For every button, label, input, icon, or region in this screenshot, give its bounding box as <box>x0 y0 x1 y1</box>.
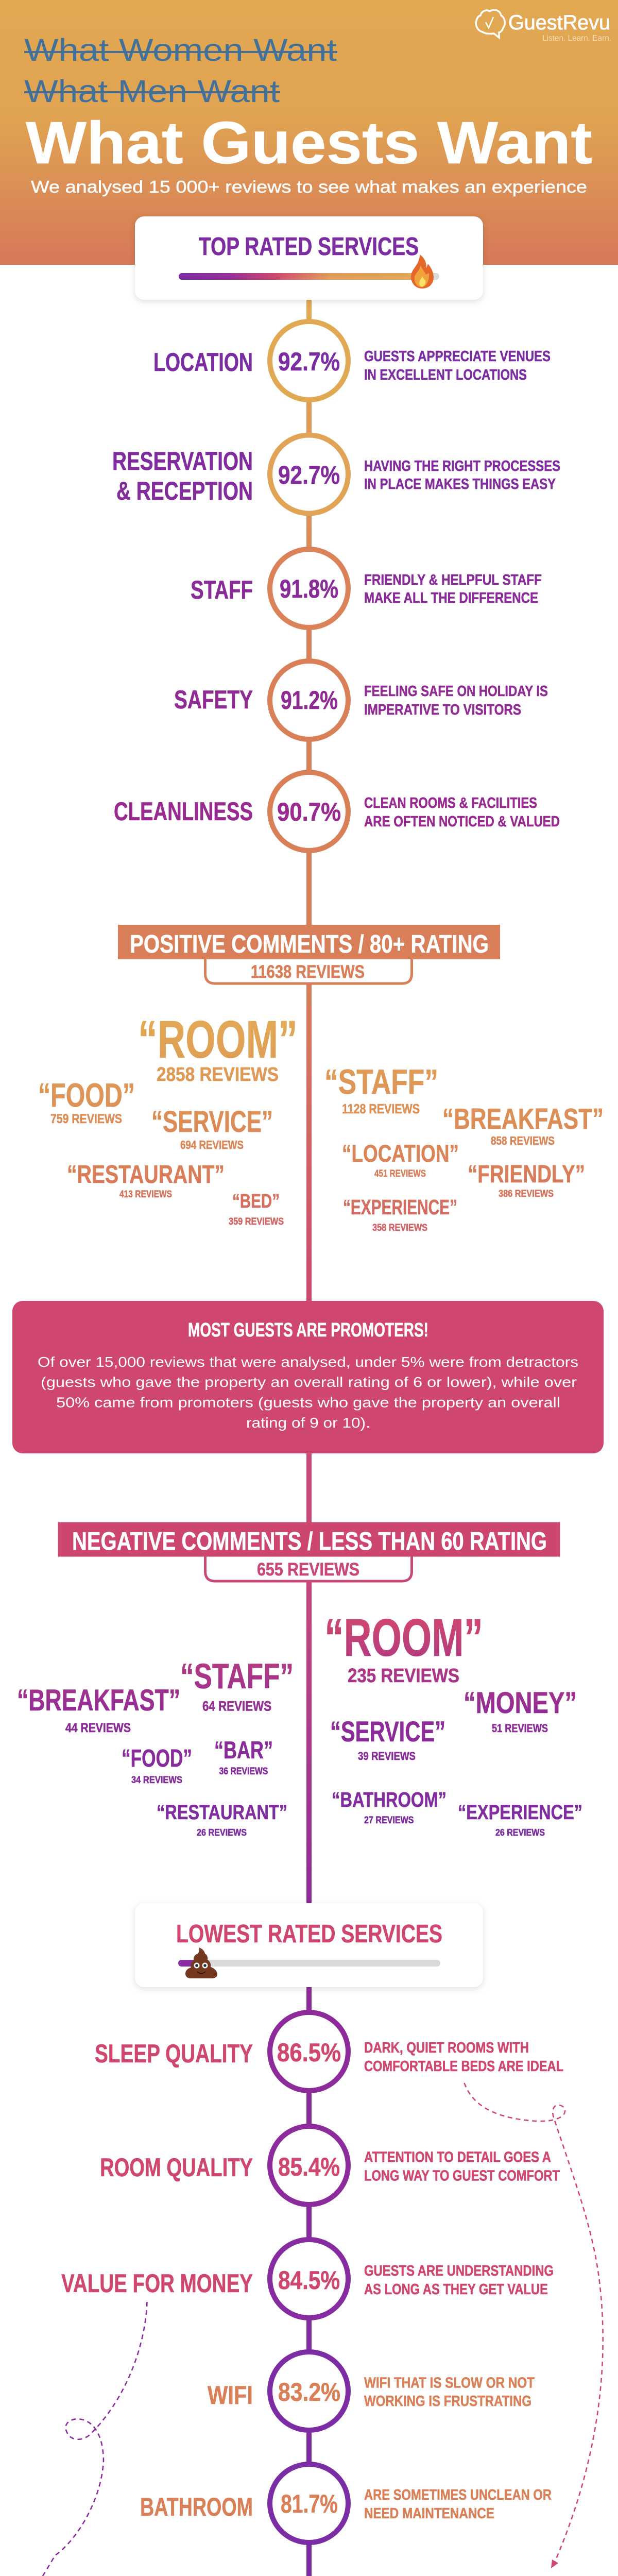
review count tab: 655 REVIEWS <box>257 1560 359 1580</box>
description <box>364 572 542 606</box>
percentage: 83.2% <box>278 2378 340 2406</box>
word cloud: negative comments <box>17 1608 582 1838</box>
word: friendly <box>468 1161 585 1199</box>
circle <box>270 2126 348 2205</box>
description <box>364 458 560 493</box>
label: VALUE FOR MONEY <box>61 2269 253 2298</box>
description: IN EXCELLENT LOCATIONS <box>364 367 527 383</box>
banner: negative comments <box>58 1522 560 1581</box>
struck-out heading: What Women Want: What Women Want <box>24 32 337 67</box>
timeline line: lowest rated <box>306 1986 312 2576</box>
word: experience <box>458 1801 582 1838</box>
icon: flame <box>411 255 434 289</box>
word: bed <box>229 1191 284 1227</box>
percentage: 92.7% <box>278 347 340 376</box>
word: friendly: 386 REVIEWS <box>499 1188 554 1199</box>
panel: most guests are promoters <box>12 1301 604 1453</box>
word: service <box>330 1715 445 1762</box>
word: breakfast: 44 REVIEWS <box>65 1721 131 1735</box>
percentage: 91.2% <box>281 686 338 715</box>
rating row: wifi <box>208 2352 535 2430</box>
word: food <box>122 1745 192 1786</box>
timeline line: negative comments <box>306 1582 312 1904</box>
description <box>364 795 560 830</box>
title: What Guests Want <box>26 109 592 176</box>
label: SLEEP QUALITY <box>95 2039 253 2068</box>
circle <box>270 435 348 513</box>
description <box>364 348 551 383</box>
review count tab <box>205 1557 412 1581</box>
word: restaurant: “RESTAURANT” <box>67 1161 225 1189</box>
word: food <box>38 1076 135 1126</box>
word: bar: 36 REVIEWS <box>219 1766 268 1777</box>
heading: top rated services: TOP RATED SERVICES <box>199 233 419 261</box>
panel body: (guests who gave the property an overall rating of 6 or lower), while over <box>41 1374 577 1390</box>
word: bar <box>214 1736 273 1777</box>
icon: logo speech cloud <box>476 10 505 38</box>
word: bar: “BAR” <box>214 1736 273 1764</box>
dashed arrow: value for money to section <box>8 2302 166 2576</box>
description: HAVING THE RIGHT PROCESSES <box>364 458 560 474</box>
label: ROOM QUALITY <box>100 2153 253 2182</box>
description: COMFORTABLE BEDS ARE IDEAL <box>364 2058 563 2075</box>
circle <box>270 661 348 739</box>
description <box>364 2375 535 2410</box>
circle <box>270 321 348 400</box>
label: LOCATION <box>153 348 253 377</box>
percentage: 86.5% <box>277 2038 341 2067</box>
word: service <box>151 1105 273 1151</box>
word: service: “SERVICE” <box>151 1105 273 1139</box>
circle <box>270 2240 348 2318</box>
percentage: 84.5% <box>278 2266 340 2295</box>
word: money: “MONEY” <box>464 1686 577 1720</box>
label: STAFF <box>191 575 253 604</box>
word: restaurant: 413 REVIEWS <box>119 1189 172 1200</box>
word: bathroom: “BATHROOM” <box>332 1788 447 1811</box>
description: DARK, QUIET ROOMS WITH <box>364 2040 529 2056</box>
arrow head <box>551 2560 558 2568</box>
word cloud: positive comments <box>38 1010 604 1233</box>
circle <box>270 772 348 851</box>
description: NEED MAINTENANCE <box>364 2505 494 2522</box>
circle <box>270 2464 348 2543</box>
description: LONG WAY TO GUEST COMFORT <box>364 2168 560 2184</box>
logo wordmark: GuestRevu <box>508 11 610 34</box>
percentage: 85.4% <box>278 2153 340 2181</box>
description: MAKE ALL THE DIFFERENCE <box>364 590 538 606</box>
circle <box>270 2352 348 2430</box>
word: experience: 26 REVIEWS <box>495 1827 545 1838</box>
word: experience: 358 REVIEWS <box>372 1223 427 1233</box>
word: staff: 64 REVIEWS <box>202 1698 271 1714</box>
circle <box>270 549 348 628</box>
review count tab: 11638 REVIEWS <box>251 962 365 982</box>
timeline line: positive to promoters <box>306 985 312 1301</box>
description <box>364 2487 552 2522</box>
word: staff <box>324 1062 438 1116</box>
rating row: location <box>153 321 551 400</box>
word: breakfast <box>17 1684 180 1735</box>
word: experience: “EXPERIENCE” <box>458 1801 582 1824</box>
description <box>364 2149 560 2184</box>
description: CLEAN ROOMS & FACILITIES <box>364 795 537 811</box>
rating row: value for money <box>61 2240 554 2318</box>
word: bathroom: 27 REVIEWS <box>364 1815 414 1826</box>
rating bar <box>179 273 439 280</box>
panel body: rating of 9 or 10). <box>246 1415 370 1431</box>
banner heading: POSITIVE COMMENTS / 80+ RATING <box>130 930 489 958</box>
rating bar <box>178 1960 440 1967</box>
word: staff: 1128 REVIEWS <box>342 1101 420 1116</box>
rating row: room quality <box>100 2126 560 2205</box>
description: GUESTS APPRECIATE VENUES <box>364 348 551 365</box>
rating row: staff <box>191 549 542 628</box>
word: room: “ROOM” <box>138 1010 298 1069</box>
word: restaurant <box>157 1801 287 1838</box>
word: restaurant <box>67 1161 225 1200</box>
word: breakfast: “BREAKFAST” <box>17 1684 180 1717</box>
description: WORKING IS FRUSTRATING <box>364 2393 531 2410</box>
description: GUESTS ARE UNDERSTANDING <box>364 2263 554 2279</box>
label: SAFETY <box>174 685 253 714</box>
label: RESERVATION <box>112 447 253 476</box>
rating row: sleep quality <box>95 2012 563 2091</box>
label: WIFI <box>208 2381 253 2410</box>
description: FEELING SAFE ON HOLIDAY IS <box>364 683 548 700</box>
word: room: “ROOM” <box>324 1608 483 1667</box>
description <box>364 2263 554 2298</box>
dashed arrow: sleep quality to did you know <box>465 2083 603 2568</box>
word: staff <box>180 1656 294 1714</box>
word: location: 451 REVIEWS <box>374 1168 426 1179</box>
description: IN PLACE MAKES THINGS EASY <box>364 476 556 493</box>
card: lowest rated services <box>135 1903 483 1987</box>
word: restaurant: 26 REVIEWS <box>197 1827 247 1838</box>
word: room <box>324 1608 483 1687</box>
description: ARE OFTEN NOTICED & VALUED <box>364 814 560 830</box>
description: ATTENTION TO DETAIL GOES A <box>364 2149 551 2166</box>
word: bed: “BED” <box>232 1191 280 1212</box>
description: ARE SOMETIMES UNCLEAN OR <box>364 2487 552 2503</box>
panel body: Of over 15,000 reviews that were analysed, under 5% were from detractors <box>38 1354 578 1370</box>
word: experience: “EXPERIENCE” <box>343 1195 457 1219</box>
word: staff: “STAFF” <box>180 1656 294 1696</box>
rating row: reservation and reception <box>112 435 560 513</box>
label: & RECEPTION <box>116 477 253 505</box>
description: AS LONG AS THEY GET VALUE <box>364 2281 548 2298</box>
timeline line: promoters to negative <box>306 1453 312 1523</box>
word: service: 39 REVIEWS <box>358 1750 416 1762</box>
rating row: safety <box>174 661 548 739</box>
panel heading: MOST GUESTS ARE PROMOTERS! <box>188 1319 428 1341</box>
panel body <box>38 1354 578 1431</box>
circle <box>270 2012 348 2091</box>
review count tab <box>205 959 412 984</box>
word: food: 34 REVIEWS <box>131 1775 182 1786</box>
percentage: 92.7% <box>278 461 340 489</box>
label: CLEANLINESS <box>114 797 253 826</box>
word: food: “FOOD” <box>122 1745 192 1772</box>
banner: positive comments <box>118 925 500 984</box>
card: top rated services <box>135 216 483 300</box>
description <box>364 683 548 718</box>
word: experience <box>343 1195 457 1233</box>
header band <box>0 0 618 265</box>
word: service: 694 REVIEWS <box>180 1138 244 1151</box>
word: bed: 359 REVIEWS <box>229 1216 284 1227</box>
logo tagline: Listen. Learn. Earn. <box>542 34 611 43</box>
percentage: 81.7% <box>281 2489 338 2518</box>
word: room: 235 REVIEWS <box>348 1665 459 1687</box>
subtitle: We analysed 15 000+ reviews to see what makes an experience <box>31 177 587 196</box>
word: bathroom <box>332 1788 447 1826</box>
word: money: 51 REVIEWS <box>492 1722 548 1735</box>
description: WIFI THAT IS SLOW OR NOT <box>364 2375 535 2392</box>
rating row: bathroom <box>140 2464 552 2543</box>
panel body: 50% came from promoters (guests who gave the property an overall <box>56 1394 560 1411</box>
word: money <box>464 1686 577 1735</box>
description: FRIENDLY & HELPFUL STAFF <box>364 572 542 588</box>
struck-out heading: What Men Want: What Men Want <box>24 74 280 109</box>
word: food: “FOOD” <box>38 1076 135 1114</box>
label <box>112 447 253 505</box>
word: location: “LOCATION” <box>342 1140 459 1167</box>
label: BATHROOM <box>140 2493 253 2521</box>
description <box>364 2040 563 2075</box>
word: food: 759 REVIEWS <box>50 1112 122 1126</box>
word: service: “SERVICE” <box>330 1715 445 1748</box>
word: breakfast: 858 REVIEWS <box>491 1134 555 1147</box>
icon: poop emoji <box>185 1947 217 1978</box>
percentage: 91.8% <box>280 574 338 603</box>
word: restaurant: “RESTAURANT” <box>157 1801 287 1824</box>
rating row: cleanliness <box>114 772 560 851</box>
description: IMPERATIVE TO VISITORS <box>364 702 521 718</box>
logo: GuestRevu top <box>476 10 611 43</box>
word: staff: “STAFF” <box>324 1062 438 1101</box>
word: location <box>342 1140 459 1179</box>
timeline line: top rated <box>306 299 312 925</box>
word: room <box>138 1010 298 1086</box>
word: room: 2858 REVIEWS <box>157 1064 279 1086</box>
word: breakfast <box>442 1103 604 1147</box>
word: friendly: “FRIENDLY” <box>468 1161 585 1188</box>
percentage: 90.7% <box>277 798 341 826</box>
heading: lowest rated services: LOWEST RATED SERVICES <box>176 1920 442 1948</box>
